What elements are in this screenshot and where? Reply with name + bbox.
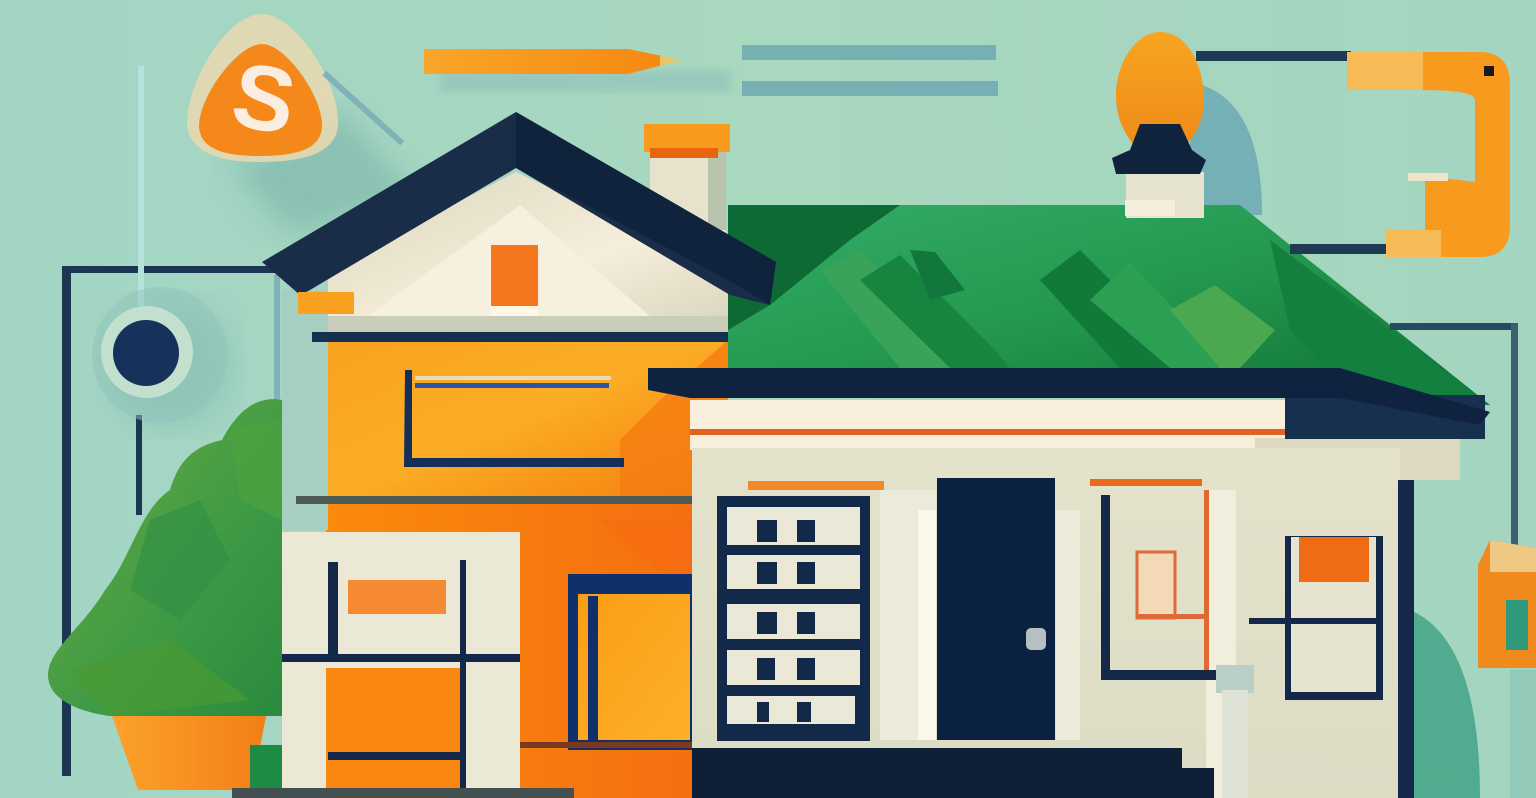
icon: pencil	[424, 49, 730, 92]
right window with sign	[1101, 495, 1216, 680]
orange door	[520, 574, 696, 750]
chimney left	[644, 124, 730, 240]
door knob	[1026, 628, 1046, 650]
lower garage block	[232, 532, 574, 798]
icon: dollar badge	[187, 14, 338, 162]
cream house body	[648, 368, 1490, 798]
orange tower wall	[282, 290, 728, 798]
front steps	[692, 748, 1214, 798]
pipe	[1216, 665, 1254, 798]
bulb chimney	[1112, 32, 1206, 218]
plant	[48, 399, 282, 798]
columns	[880, 490, 1236, 798]
main door	[937, 478, 1055, 740]
gable window	[491, 245, 538, 307]
wall window frame	[404, 370, 624, 467]
frame lines left	[62, 66, 280, 776]
decorative lines top	[322, 45, 998, 146]
far right window	[1249, 536, 1383, 700]
icon: tape arm right	[1196, 51, 1510, 257]
shelf window	[717, 496, 870, 741]
icon: gauge circle	[92, 287, 228, 423]
green roof	[728, 205, 1490, 405]
pot	[112, 716, 266, 790]
gable roof	[262, 112, 776, 332]
side lines and bag	[1390, 323, 1536, 668]
icon: dollar badge: S	[225, 43, 303, 155]
